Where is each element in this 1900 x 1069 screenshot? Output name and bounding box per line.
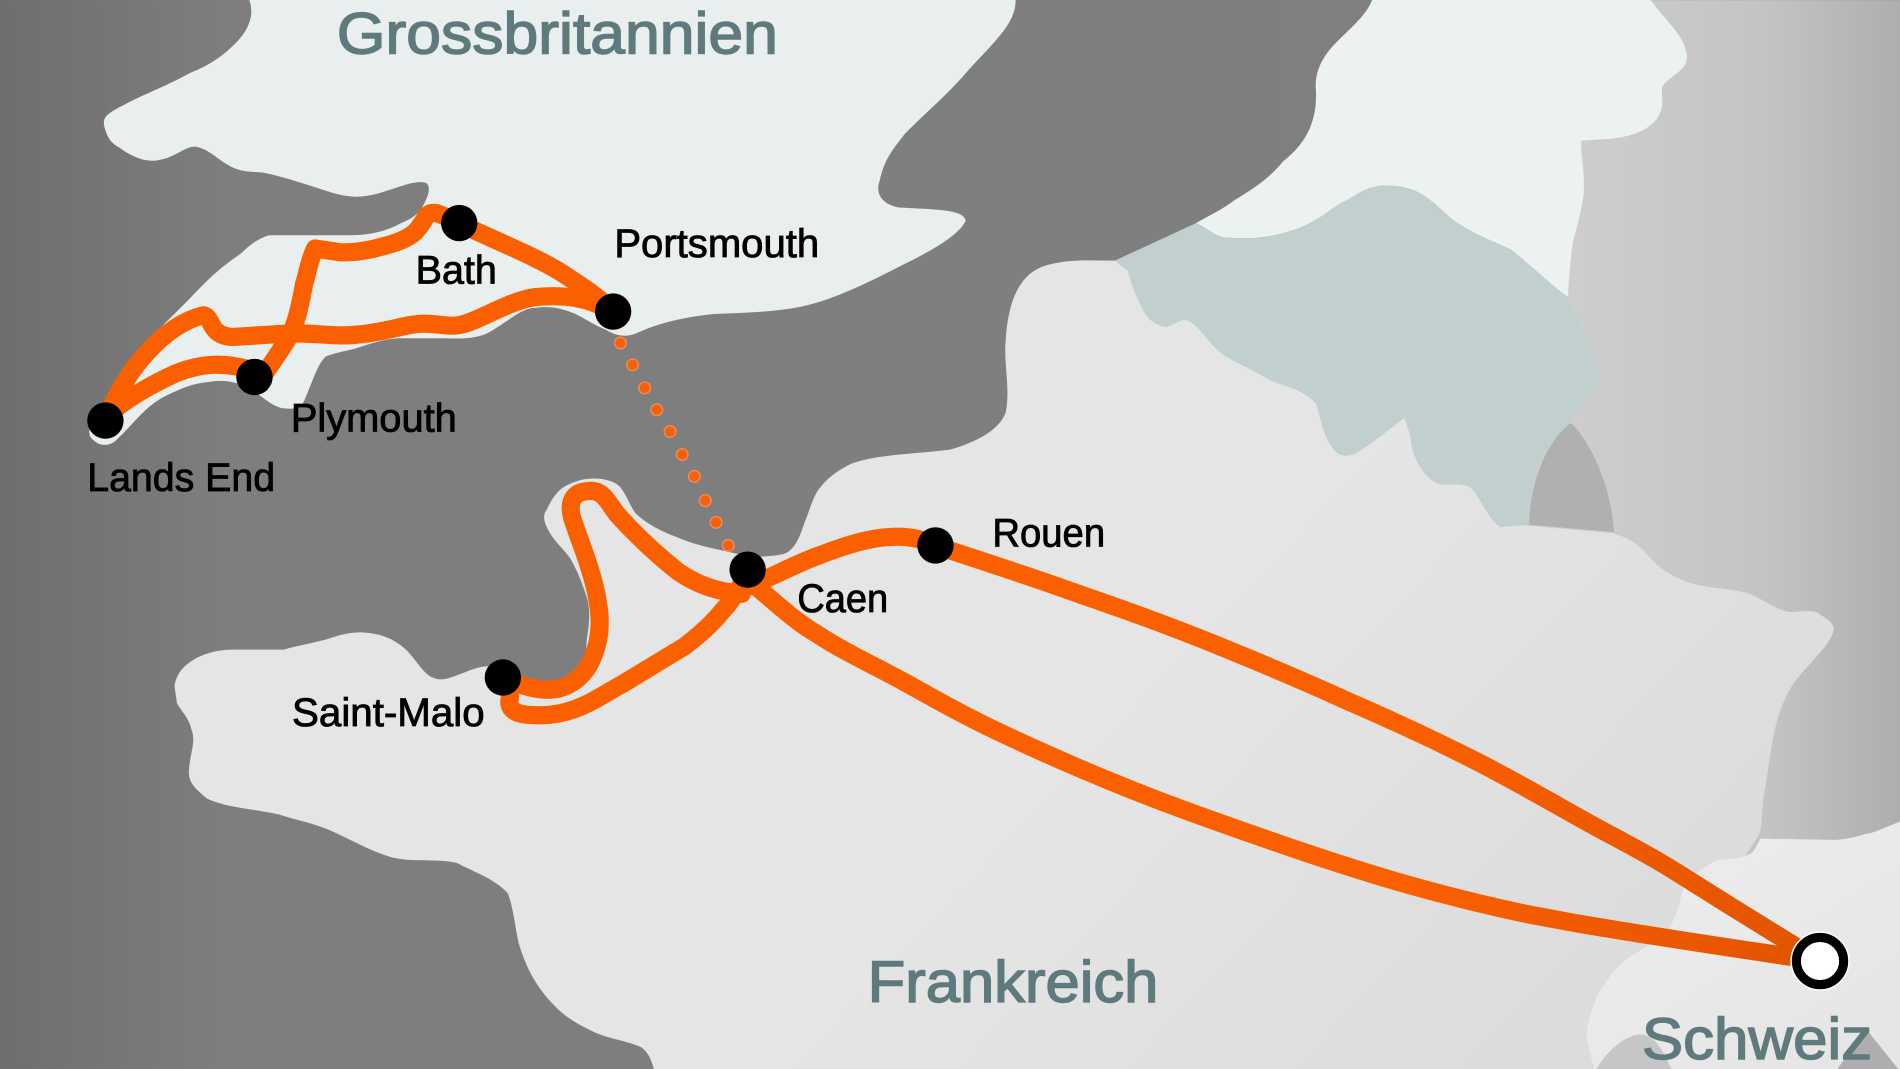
land: Grossbritannien	[89, 0, 1016, 445]
start marker: Schweiz ring	[1790, 931, 1850, 991]
label: Saint-Malo: Saint-Malo	[292, 691, 485, 735]
stop: Caen	[729, 551, 766, 588]
route: Lands End to Plymouth	[111, 365, 254, 412]
label: Portsmouth: Portsmouth	[614, 222, 819, 266]
route: Saint-Malo direct to Caen	[509, 572, 748, 715]
label: Plymouth: Plymouth	[291, 397, 457, 441]
land: pale northern Europe	[1196, 0, 1687, 297]
stop: Plymouth	[236, 359, 273, 395]
heading: Grossbritannien: Grossbritannien	[337, 1, 778, 66]
stop: Saint-Malo	[485, 659, 521, 696]
land: Schweiz	[1587, 822, 1900, 1069]
land: southern patch right	[1836, 1029, 1900, 1069]
ferry route: Portsmouth to Caen, dotted	[615, 337, 734, 551]
route: Bath to Plymouth	[262, 213, 459, 378]
land: teal region	[1115, 186, 1599, 527]
label: Caen: Caen	[797, 577, 888, 621]
land: Frankreich	[174, 260, 1834, 1069]
stop: Lands End	[87, 402, 124, 439]
land: small dark grey wedge	[1529, 423, 1614, 532]
route: Caen to Schweiz	[748, 579, 1820, 961]
neighbouring land, grey	[1515, 0, 1900, 1069]
route: Bath to Portsmouth	[459, 223, 612, 312]
stop markers	[87, 205, 954, 696]
heading: Frankreich: Frankreich	[868, 950, 1158, 1015]
route: Caen to Rouen	[748, 537, 935, 587]
label: Lands End: Lands End	[87, 456, 275, 500]
route: Saint-Malo coastal loop to Caen	[502, 491, 742, 690]
stop: Portsmouth	[595, 293, 631, 330]
route network	[109, 213, 1820, 961]
route: Rouen to Schweiz	[935, 545, 1820, 961]
stop: Rouen	[917, 527, 954, 564]
label: Rouen: Rouen	[992, 512, 1105, 556]
route: Lands End to Portsmouth	[109, 296, 612, 412]
stop: Bath	[441, 205, 477, 241]
land: southern patch left	[1595, 1035, 1672, 1069]
label: Bath: Bath	[416, 249, 497, 293]
